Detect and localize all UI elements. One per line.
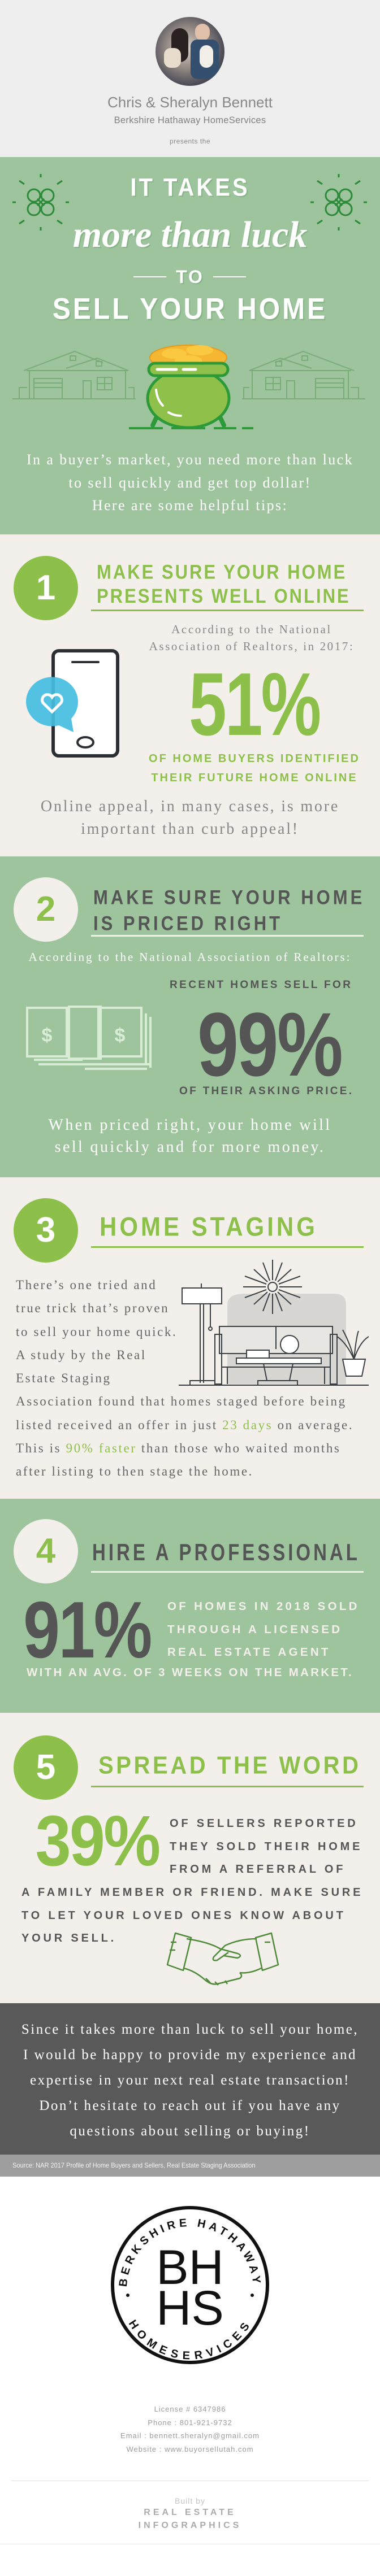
text: when priced right: When priced right, your home will	[49, 1116, 331, 1134]
title line: SELL YOUR HOME: SELL YOUR HOME	[53, 293, 327, 326]
body text: There’s one tried and	[16, 1278, 157, 1292]
stat caption	[167, 1600, 360, 1659]
stat caption	[149, 752, 360, 784]
intro text: In a buyer’s market, you need more than luck	[27, 451, 353, 468]
logo: BHHS: BERKSHIRE HATHAWAY	[119, 2219, 261, 2287]
icon: money stack	[26, 1006, 152, 1070]
heading 1	[97, 560, 351, 607]
logo: BHHS: BH	[156, 2240, 224, 2295]
title line: IT TAKES: IT TAKES	[130, 173, 250, 202]
heading 4: HIRE A PROFESSIONAL	[92, 1539, 360, 1565]
panel: tip 5: A FAMILY MEMBER OR FRIEND. MAKE SURE	[21, 1886, 363, 1899]
stat 51%: 51%	[189, 655, 319, 754]
panel: closing message	[0, 2003, 380, 2155]
built by credit	[139, 2496, 241, 2530]
logo: BHHS: HOMESERVICES	[129, 2320, 249, 2359]
panel: closing message: Don’t hesitate to reach out if you have any	[39, 2098, 341, 2113]
body text: This is 90% faster than those who waited months	[16, 1441, 340, 1455]
panel: tip 5	[0, 1713, 380, 2003]
number circle 2	[14, 877, 78, 942]
source bar: Source: NAR 2017 Profile of Home Buyers and Sellers, Real Estate Staging Association	[12, 2161, 256, 2169]
title panel	[0, 157, 380, 534]
heading 2: MAKE SURE YOUR HOME	[93, 886, 365, 909]
photo of agents	[156, 17, 224, 86]
icon: living room	[179, 1260, 369, 1386]
body text: Estate Staging	[16, 1371, 111, 1385]
panel: closing message: expertise in your next real estate transaction!	[30, 2073, 350, 2088]
heading 2	[93, 886, 365, 935]
heading 3: HOME STAGING	[100, 1212, 318, 1242]
intro text: Here are some helpful tips:	[92, 497, 288, 514]
stat caption: REAL ESTATE AGENT	[167, 1646, 331, 1659]
panel: tip 2	[0, 856, 380, 1177]
title line: TO: TO	[176, 267, 204, 287]
built by credit: Built by	[175, 2496, 205, 2505]
text: when priced right: sell quickly and for more money.	[55, 1138, 325, 1156]
text: according: Association of Realtors, in 2017:	[149, 639, 354, 653]
caption: asking price: OF THEIR ASKING PRICE.	[179, 1085, 353, 1097]
body text: A study by the Real	[16, 1348, 146, 1362]
built by credit: REAL ESTATE	[144, 2508, 236, 2517]
panel: tip 4	[0, 1499, 380, 1713]
logo: BHHS: HS	[156, 2281, 224, 2335]
heading 1: PRESENTS WELL ONLINE	[97, 585, 351, 607]
panel: tip 5: YOUR SELL.	[21, 1932, 116, 1944]
panel: closing message: Since it takes more than luck to sell your home,	[21, 2022, 359, 2037]
number circle 5: 5	[36, 1748, 55, 1787]
text: online appeal: important than curb appeal!	[81, 820, 299, 838]
title line: more than luck: more than luck	[73, 214, 307, 255]
icon: houses right	[242, 351, 365, 399]
icon: clover left	[12, 174, 69, 230]
panel: closing message: questions about selling or buying!	[70, 2124, 310, 2139]
company: Berkshire Hathaway HomeServices	[114, 115, 266, 125]
text: online appeal	[41, 798, 339, 838]
stat caption: OF HOME BUYERS IDENTIFIED	[149, 752, 360, 765]
text: when priced right	[49, 1116, 331, 1156]
stat caption: THEY SOLD THEIR HOME	[170, 1840, 362, 1853]
icon: handshake	[166, 1932, 279, 1986]
icon: money stack: $	[115, 1025, 126, 1046]
text: according: According to the National	[171, 623, 332, 636]
body text: Association found that homes staged before being	[16, 1394, 347, 1408]
contact info	[120, 2405, 260, 2453]
agent name: Chris & Sheralyn Bennett	[107, 94, 273, 111]
header panel	[0, 0, 380, 157]
icon: clover right	[310, 174, 367, 230]
text: online appeal: Online appeal, in many cases, is more	[41, 798, 339, 815]
built by credit: INFOGRAPHICS	[139, 2521, 241, 2530]
heading 2: IS PRICED RIGHT	[93, 912, 283, 935]
icon: houses left	[12, 351, 136, 399]
contact info: Phone : 801-921-9732	[148, 2418, 232, 2427]
text: according	[149, 623, 354, 653]
presents the: presents the	[170, 137, 210, 145]
body text	[16, 1278, 353, 1478]
body text: after listing to then stage the home.	[16, 1464, 253, 1478]
icon: pot of gold	[129, 345, 253, 429]
number circle 4: 4	[36, 1531, 55, 1570]
number circle 5	[14, 1735, 78, 1800]
heading 5: SPREAD THE WORD	[98, 1752, 361, 1779]
intro text: to sell quickly and get top dollar!	[68, 475, 312, 490]
body text: true trick that’s proven	[16, 1301, 169, 1315]
contact info: Website : www.buyorsellutah.com	[126, 2445, 254, 2453]
stat caption: OF HOMES IN 2018 SOLD	[167, 1600, 360, 1613]
panel: tip 4: WITH AN AVG. OF 3 WEEKS ON THE MARKET.	[27, 1666, 353, 1679]
contact info: Email : bennett.sheralyn@gmail.com	[120, 2431, 260, 2440]
panel: tip 3	[0, 1177, 380, 1499]
number circle 3: 3	[36, 1211, 55, 1250]
panel: tip 1	[0, 534, 380, 856]
number circle 3	[14, 1198, 78, 1263]
stat caption	[170, 1817, 362, 1876]
caption: recent homes: RECENT HOMES SELL FOR	[170, 979, 352, 991]
number circle 1	[14, 556, 78, 620]
text: according: According to the National Association of Realtors:	[29, 950, 351, 964]
source bar	[0, 2155, 380, 2177]
icon: phone with heart bubble	[26, 649, 119, 758]
stat caption: THROUGH A LICENSED	[167, 1622, 342, 1636]
panel: closing message: I would be happy to provide my experience and	[23, 2047, 357, 2062]
number circle 4	[14, 1519, 78, 1583]
panel: tip 5: TO LET YOUR LOVED ONES KNOW ABOUT	[21, 1909, 346, 1922]
body text: listed received an offer in just 23 days on average.	[16, 1418, 353, 1432]
number circle 1: 1	[36, 568, 55, 607]
stat 99%: 99%	[197, 994, 342, 1095]
stat caption: THEIR FUTURE HOME ONLINE	[151, 772, 358, 784]
heading 1: MAKE SURE YOUR HOME	[97, 560, 347, 583]
stat caption: OF SELLERS REPORTED	[170, 1817, 358, 1830]
body text: to sell your home quick.	[16, 1325, 177, 1339]
number circle 2: 2	[36, 890, 55, 929]
stat 91%: 91%	[23, 1585, 151, 1675]
logo: BHHS	[111, 2206, 269, 2364]
contact info: License # 6347986	[154, 2405, 226, 2413]
icon: money stack: $	[42, 1025, 53, 1046]
intro text	[27, 451, 353, 514]
stat 39%: 39%	[36, 1801, 159, 1881]
stat caption: FROM A REFERRAL OF	[170, 1863, 346, 1876]
